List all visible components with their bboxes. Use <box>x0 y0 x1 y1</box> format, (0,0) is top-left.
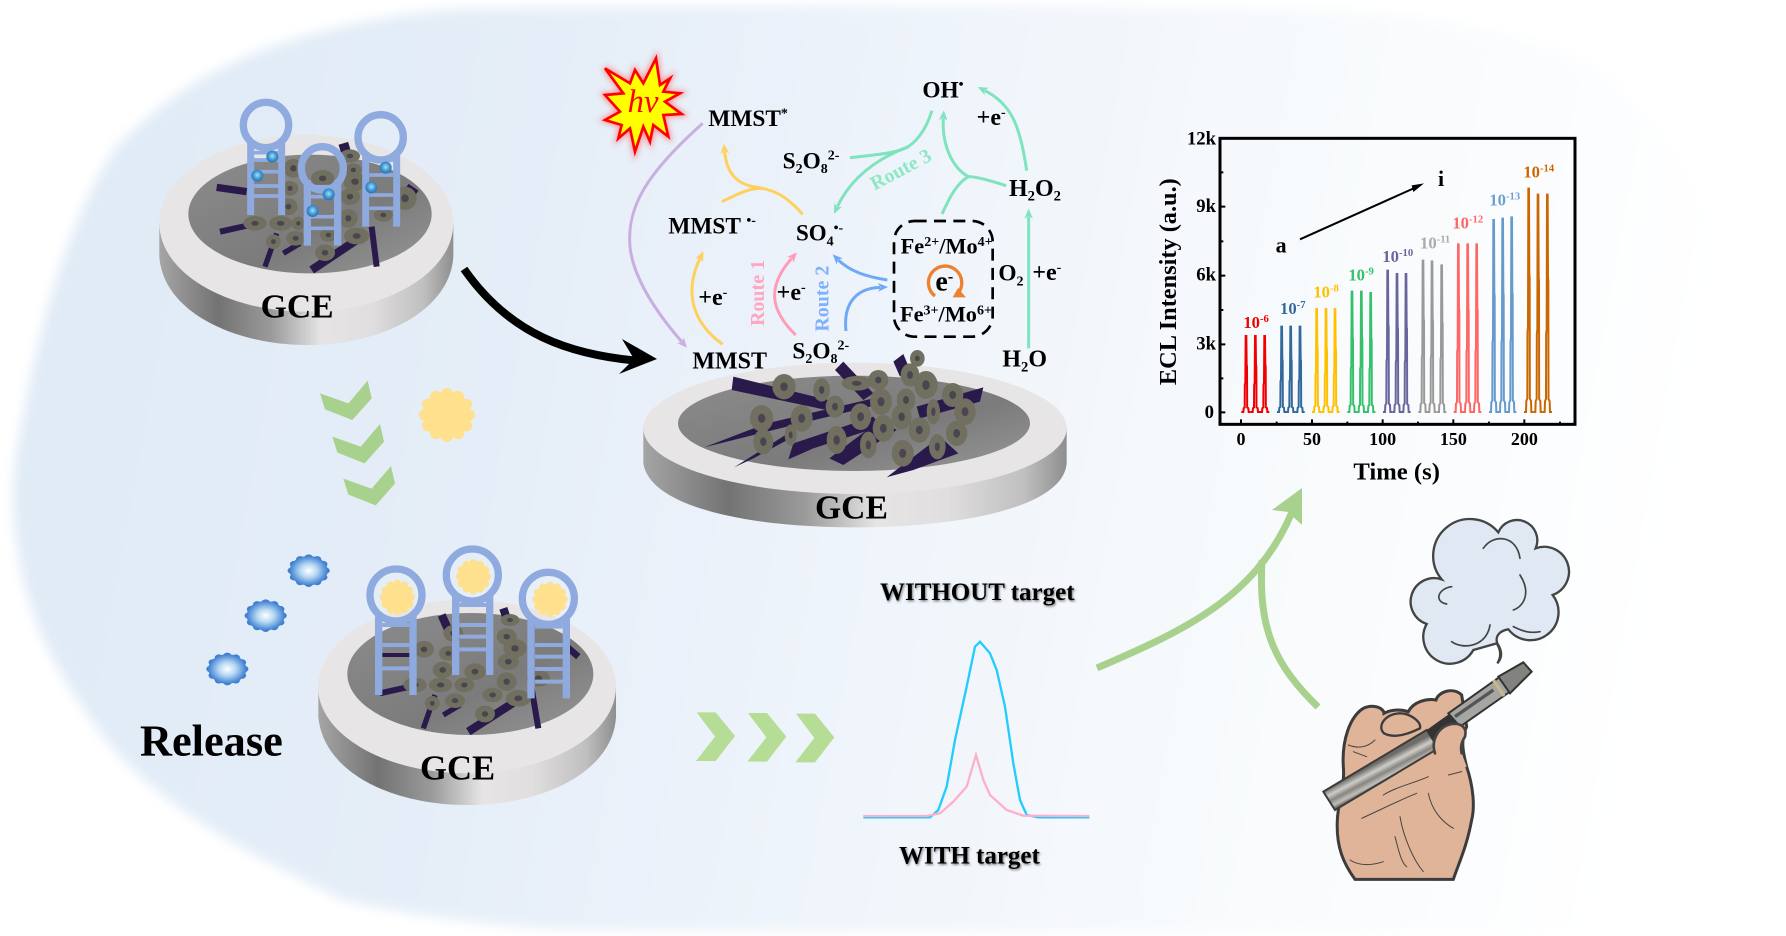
concentration labels: 10 <box>1348 266 1365 285</box>
series: 10^-11 <box>1418 261 1446 412</box>
chemical labels: /Mo <box>938 233 978 258</box>
nanorods <box>380 608 578 732</box>
chemical labels: +e <box>698 285 723 311</box>
chemical labels: •- <box>834 221 844 236</box>
chemical labels: * <box>781 106 788 121</box>
concentration labels: -8 <box>1330 284 1339 295</box>
nanorings <box>403 614 550 722</box>
chemical labels: MMST <box>708 106 781 132</box>
signal comparison <box>863 579 1089 869</box>
chemical labels: 2- <box>828 149 840 164</box>
nanorings <box>750 350 976 467</box>
series: 10^-13 <box>1489 217 1516 412</box>
chemical labels: OH <box>922 77 959 103</box>
curve: with target <box>863 755 1089 816</box>
concentration labels: 10 <box>1452 214 1469 233</box>
y axis title: ECL Intensity (a.u.) <box>1155 178 1182 385</box>
chemical labels: - <box>801 280 806 295</box>
right chevrons <box>696 712 834 762</box>
hand and palm <box>1337 691 1473 879</box>
mechanism panel and main electrode <box>605 58 1067 527</box>
route labels: Route 2 <box>811 266 833 332</box>
concentration labels: 10 <box>1420 234 1437 253</box>
label: GCE: GCE <box>815 489 888 526</box>
arrows: purple excitation decay <box>630 123 703 342</box>
series: 10^-10 <box>1383 271 1411 412</box>
series: 10^-12 <box>1454 244 1481 412</box>
chemical labels: H <box>1002 347 1021 373</box>
disk top <box>318 600 616 773</box>
label: GCE: GCE <box>420 749 495 787</box>
y axis labels: 9k <box>1196 196 1217 217</box>
nanorods <box>217 143 417 270</box>
label: Release: Release <box>140 716 283 766</box>
chemical labels: SO <box>796 221 827 246</box>
concentration labels: -11 <box>1437 235 1450 246</box>
vape barrel <box>1323 730 1438 810</box>
dashed catalyst box <box>894 221 993 337</box>
concentration labels: -7 <box>1297 300 1306 311</box>
hand creases <box>1348 740 1462 872</box>
label: WITHOUT target: WITHOUT target <box>880 579 1075 606</box>
route labels <box>747 145 935 332</box>
thumb <box>1433 724 1467 777</box>
concentration labels: 10 <box>1382 247 1399 266</box>
chemical labels: +e <box>777 280 801 306</box>
electron cycle: e <box>935 267 948 298</box>
down chevrons <box>320 381 395 505</box>
concentration labels: -10 <box>1399 248 1413 259</box>
chemical labels: +e <box>1032 260 1057 286</box>
chemical labels: H <box>1009 176 1028 202</box>
x axis labels <box>1236 429 1538 449</box>
chemical labels: O <box>1035 176 1054 202</box>
concentration labels: -12 <box>1469 215 1483 226</box>
main disk well <box>678 376 1030 471</box>
icon: hv starburst: hv <box>628 84 659 120</box>
chemical labels: O <box>1028 347 1047 373</box>
curve: without target <box>863 642 1089 817</box>
chemical labels: - <box>1057 260 1062 275</box>
chemical labels: - <box>723 285 728 300</box>
disk top <box>159 135 453 312</box>
x axis labels: 0 <box>1236 429 1245 449</box>
chemical labels: 2- <box>837 339 849 354</box>
y axis labels: 6k <box>1196 265 1217 286</box>
e-cigarette illustration <box>1323 519 1569 879</box>
chemical labels <box>668 77 1062 375</box>
series: 10^-7 <box>1277 327 1305 412</box>
electron cycle <box>928 266 966 298</box>
chemical labels: 2 <box>1016 274 1023 289</box>
vape tank <box>1448 677 1510 727</box>
concentration labels: -13 <box>1506 192 1520 203</box>
vapour cloud <box>1411 519 1569 664</box>
series: 10^-9 <box>1347 292 1375 412</box>
chemical labels: 6+ <box>977 303 992 318</box>
disk well <box>347 613 593 735</box>
arrows: blue route 2 <box>838 260 887 331</box>
chemical labels: 2 <box>1021 359 1028 375</box>
axis ticks <box>1220 172 1560 424</box>
route labels: Route 1 <box>747 260 769 326</box>
trend arrow a to i: i <box>1438 166 1444 191</box>
y axis labels: 0 <box>1205 402 1214 423</box>
y axis labels: 12k <box>1187 128 1217 149</box>
trend arrow a to i <box>1276 166 1444 257</box>
chemical labels: 2 <box>805 352 812 367</box>
chemical labels: +e <box>977 105 1001 131</box>
ECL chart <box>1155 128 1575 485</box>
main disk body <box>643 427 1067 527</box>
electrode 1: GCE with hairpins <box>159 102 453 345</box>
nanorods <box>704 354 983 477</box>
concentration labels: 10 <box>1523 163 1540 182</box>
chemical labels: - <box>1001 105 1006 120</box>
arrow: pink route 1 <box>775 258 796 335</box>
y axis labels <box>1187 128 1217 423</box>
x axis labels: 50 <box>1303 429 1321 449</box>
x axis labels: 150 <box>1440 429 1467 449</box>
route labels: Route 3 <box>867 145 935 195</box>
chemical labels: 2+ <box>924 235 939 250</box>
chemical labels: 4+ <box>978 235 993 250</box>
target-bound beads <box>251 151 392 217</box>
concentration labels: 10 <box>1280 299 1297 318</box>
series: 10^-14 <box>1524 189 1552 412</box>
hairpin probes <box>243 102 403 246</box>
concentration labels: 10 <box>1243 313 1260 332</box>
black arrow to main electrode <box>464 269 657 374</box>
chemical labels: O <box>812 338 830 364</box>
disk well <box>188 155 432 273</box>
chemical labels: Fe <box>901 233 924 258</box>
chemical labels: MMST <box>692 348 767 374</box>
x axis labels: 200 <box>1511 429 1538 449</box>
chemical labels: 2 <box>1028 189 1035 205</box>
trend arrow a to i: a <box>1276 232 1287 257</box>
chemical labels: 8 <box>821 162 828 177</box>
chemical labels: 2 <box>1054 189 1061 205</box>
chemical labels: O <box>803 148 821 174</box>
chemical labels: • <box>959 78 964 93</box>
x axis labels: 100 <box>1369 429 1396 449</box>
series: 10^-8 <box>1312 309 1340 412</box>
label: WITH target: WITH target <box>899 842 1041 869</box>
vape connector <box>1427 713 1461 748</box>
x axis title: Time (s) <box>1353 458 1440 485</box>
chemical labels: Fe <box>900 302 924 327</box>
chemical labels: S <box>792 338 805 364</box>
disk body <box>318 687 616 805</box>
chemical labels: /Mo <box>938 302 977 327</box>
nanorings <box>243 149 417 261</box>
arrows: yellow MMST reduction <box>692 258 723 344</box>
electron cycle: - <box>948 267 953 286</box>
electrode 3: GCE with captured target <box>318 549 616 805</box>
arrows: teal route 3 <box>837 91 1029 348</box>
arrows: yellow merge to MMST* <box>722 152 803 214</box>
concentration labels: -6 <box>1260 314 1270 325</box>
chemical labels: •- <box>746 214 756 229</box>
main disk top <box>643 363 1067 494</box>
chemical labels: 2 <box>796 162 803 177</box>
concentration labels: 10 <box>1313 283 1330 302</box>
chemical labels: O <box>998 261 1016 287</box>
y axis labels: 3k <box>1196 333 1217 354</box>
concentration labels: -9 <box>1365 267 1374 278</box>
released blue puffs <box>140 554 330 766</box>
chemical labels: 8 <box>830 352 837 367</box>
concentration labels <box>1243 163 1555 332</box>
chemical labels: MMST <box>668 213 740 239</box>
concentration labels: 10 <box>1489 191 1506 210</box>
chemical labels: 4 <box>827 234 834 249</box>
icon: hv starburst <box>605 58 682 152</box>
concentration labels: -14 <box>1540 164 1555 175</box>
yellow target molecule <box>419 388 475 442</box>
disk body <box>159 223 453 345</box>
finger over barrel <box>1381 713 1420 736</box>
chart frame <box>1220 138 1575 424</box>
green arrow to chart <box>1097 488 1318 707</box>
hairpins with target <box>370 549 574 698</box>
chemical labels: S <box>783 148 796 174</box>
series: 10^-6 <box>1241 336 1269 412</box>
vape mouthpiece <box>1498 662 1532 693</box>
chemical labels: 3+ <box>924 303 939 318</box>
label: GCE: GCE <box>261 288 334 325</box>
